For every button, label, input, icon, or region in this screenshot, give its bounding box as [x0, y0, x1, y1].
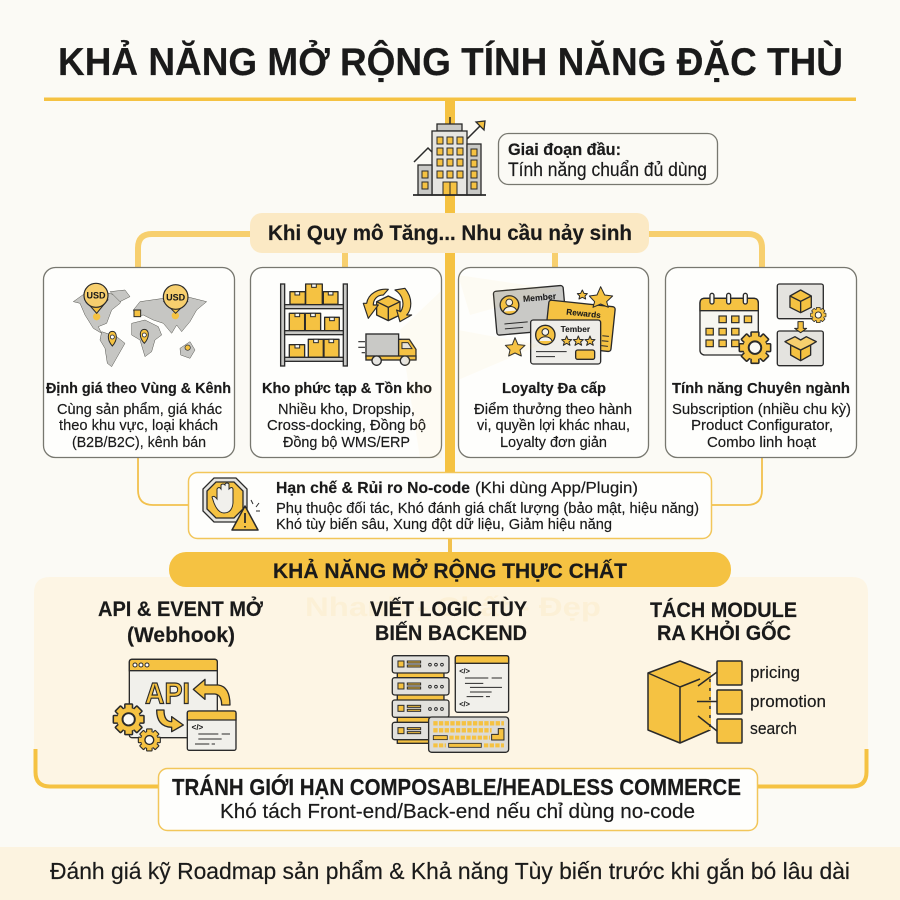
- card text: [474, 380, 632, 451]
- panel: warehouse: [250, 268, 442, 458]
- warning text: [276, 480, 699, 533]
- card text: Cross-docking, Đồng bộ: [267, 417, 426, 434]
- column: API and events: API & EVENT MỞ: [98, 597, 263, 621]
- callout: no-code limits: [188, 472, 712, 538]
- icon: member cards and stars: [493, 285, 615, 364]
- card text: Cùng sản phẩm, giá khác: [57, 401, 222, 418]
- watermark swoosh: [400, 275, 560, 458]
- icon: API window: </>: [192, 723, 204, 732]
- column: custom backend: [370, 597, 527, 752]
- icon: stop hand with warning: [203, 478, 260, 530]
- icon: member cards and stars: Rewards: [566, 307, 602, 320]
- callout: composable limit: [158, 768, 758, 830]
- card text: Nhiều kho, Dropship,: [278, 401, 415, 418]
- column: split modules: [648, 599, 826, 743]
- warning text: Phụ thuộc đối tác, Khó đánh giá chất lượng (bảo mật, hiệu năng): [276, 500, 699, 517]
- heading pill: needs arise: [250, 213, 649, 253]
- heading pill: real extensibility: [169, 552, 731, 587]
- card text: Combo linh hoạt: [707, 434, 817, 451]
- footer banner: Đánh giá kỹ Roadmap sản phẩm & Khả năng Tùy biến trước khi gắn bó lâu dài: [50, 858, 850, 884]
- card text: vi, quyền lợi khác nhau,: [477, 417, 630, 434]
- card text: [46, 380, 231, 451]
- callout: initial stage: Giai đoạn đầu:: [508, 140, 621, 159]
- warning text: (Khi dùng App/Plugin): [475, 480, 638, 497]
- callout: initial stage: [498, 134, 718, 184]
- module labels: promotion: [750, 692, 826, 711]
- icon: API window: [113, 659, 236, 751]
- bottom gold bracket: [36, 749, 866, 786]
- title: KHẢ NĂNG MỞ RỘNG TÍNH NĂNG ĐẶC THÙ: [58, 39, 843, 84]
- column: custom backend: BIẾN BACKEND: [375, 622, 527, 645]
- warning text: Hạn chế & Rủi ro No-code: [276, 480, 470, 497]
- card text: Tính năng Chuyên ngành: [672, 380, 850, 397]
- callout: initial stage: Tính năng chuẩn đủ dùng: [508, 160, 707, 181]
- icon: calendar, gear and boxes: [700, 284, 826, 366]
- card text: Điểm thưởng theo hành: [474, 401, 632, 418]
- warning text: Khó tùy biến sâu, Xung đột dữ liệu, Giảm hiệu năng: [276, 516, 612, 533]
- icon: world map with price pins: [73, 283, 207, 367]
- callout: composable limit: TRÁNH GIỚI HẠN COMPOSABLE/HEADLESS COMMERCE: [172, 773, 741, 800]
- card text: Product Configurator,: [691, 417, 833, 434]
- icon: servers, code and keyboard: </>: [459, 700, 470, 709]
- icon: servers, code and keyboard: [392, 656, 509, 752]
- column: custom backend: VIẾT LOGIC TÙY: [370, 597, 527, 621]
- column: split modules: RA KHỎI GỐC: [657, 621, 791, 645]
- title rule: [44, 98, 856, 101]
- branch connectors to cards: [138, 234, 762, 505]
- card text: [672, 380, 851, 451]
- column: API and events: [98, 597, 263, 751]
- module labels: pricing: [750, 663, 800, 682]
- icon: cube with modules: [648, 661, 742, 743]
- card text: [262, 380, 432, 451]
- module labels: [750, 663, 826, 738]
- heading pill: real extensibility: KHẢ NĂNG MỞ RỘNG THỰC CHẤT: [273, 559, 627, 583]
- footer banner: [0, 847, 900, 900]
- icon: member cards and stars: Tember: [561, 324, 591, 334]
- watermark text: Nhanh - Chất - Đẹp: [305, 592, 601, 622]
- trunk between warning and pill: [448, 539, 452, 553]
- light capability panel: [34, 577, 868, 788]
- heading pill: needs arise: Khi Quy mô Tăng... Nhu cầu nảy sinh: [268, 222, 632, 245]
- icon: world map with price pins: USD: [166, 292, 186, 302]
- card text: Subscription (nhiều chu kỳ): [672, 401, 851, 418]
- icon: growing building: [413, 117, 486, 195]
- icon: member cards and stars: Member: [523, 291, 557, 304]
- panel: regional pricing: [44, 268, 234, 458]
- panel: industry features: [666, 268, 856, 458]
- column: split modules: TÁCH MODULE: [650, 599, 797, 622]
- icon: world map with price pins: USD: [87, 291, 106, 301]
- card text: Kho phức tạp & Tồn kho: [262, 380, 432, 397]
- column: API and events: (Webhook): [127, 624, 235, 647]
- module labels: search: [750, 719, 797, 738]
- callout: composable limit: Khó tách Front-end/Back-end nếu chỉ dùng no-code: [220, 801, 695, 823]
- card text: theo khu vực, loại khách: [59, 417, 218, 434]
- card text: Loyalty đơn giản: [500, 434, 607, 451]
- card text: (B2B/B2C), kênh bán: [72, 434, 206, 451]
- central trunk connector: [445, 100, 455, 472]
- icon: API window: API: [145, 677, 190, 710]
- card text: Đồng bộ WMS/ERP: [283, 434, 410, 451]
- icon: servers, code and keyboard: </>: [459, 666, 470, 675]
- card text: Định giá theo Vùng & Kênh: [46, 380, 231, 397]
- panel: loyalty: [458, 268, 648, 458]
- icon: shelves and boxes with truck: [281, 284, 416, 366]
- card text: Loyalty Đa cấp: [502, 380, 606, 397]
